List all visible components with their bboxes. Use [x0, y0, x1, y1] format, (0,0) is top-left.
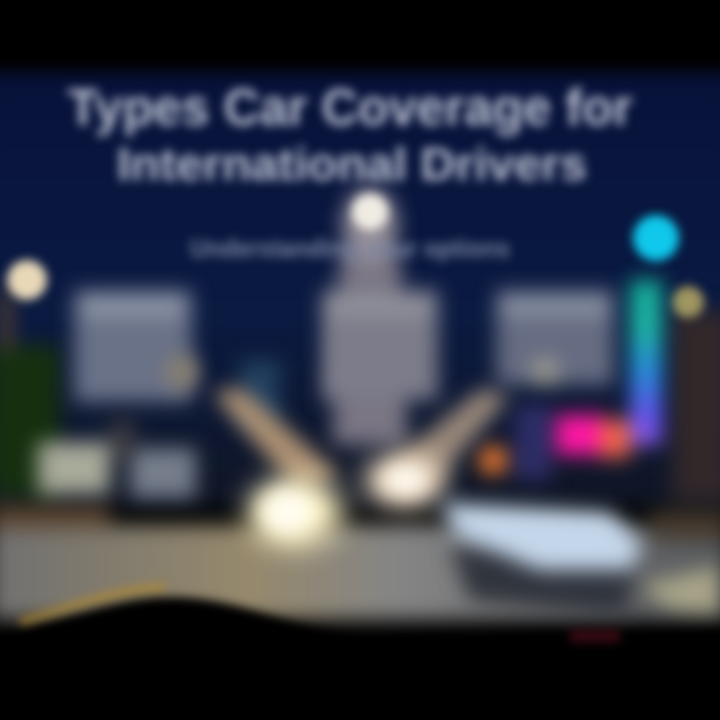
blue building glow: [515, 405, 551, 480]
left headlight glow: [247, 478, 343, 546]
right beam: [392, 388, 510, 482]
neon signs: [240, 280, 662, 480]
car shadow: [450, 545, 635, 615]
right road edge: [640, 565, 720, 615]
orange sign: [600, 420, 630, 458]
headlights: [247, 454, 445, 546]
car: [440, 502, 642, 615]
right panel glow: [530, 357, 560, 387]
center panel heading: [326, 296, 434, 316]
left street lamp glow: [7, 260, 47, 300]
center headlight glow: [365, 454, 445, 506]
panel: center: [322, 290, 438, 400]
small lamp: [165, 355, 199, 389]
headlight cores: [262, 466, 427, 534]
left panel heading: [80, 296, 185, 316]
right street lamp glow: [672, 286, 704, 318]
central tower: [332, 187, 408, 445]
night sky: [0, 68, 720, 508]
pink sign: [556, 415, 606, 455]
panel: left: [74, 290, 192, 402]
left trees: [0, 345, 60, 495]
right panel heading: [500, 296, 610, 316]
top black band: [0, 0, 720, 65]
tower top: [342, 187, 398, 263]
title: International Drivers: [117, 138, 587, 190]
title: [68, 79, 632, 190]
left sidewalk: [0, 505, 110, 529]
left storefronts: [38, 355, 199, 498]
left beam: [212, 388, 340, 495]
tower light: [352, 194, 388, 230]
panel: right: [496, 290, 614, 387]
street scene: [0, 290, 720, 620]
red reflection: [570, 630, 620, 642]
golden edge: [20, 587, 165, 622]
subtitle: Understanding your options: [190, 233, 510, 263]
headlight beams: [212, 388, 510, 495]
connector: [110, 420, 135, 460]
dim blue glow: [240, 360, 280, 425]
right dark building: [672, 310, 720, 500]
road surface: [0, 525, 720, 620]
left pole: [0, 290, 12, 350]
right sidewalk: [650, 510, 720, 540]
tower body: [332, 250, 408, 445]
vertical rainbow sign: [630, 280, 662, 445]
small orange light: [478, 445, 508, 475]
title: Types Car Coverage for: [68, 79, 632, 137]
black foreground hump: [0, 587, 720, 720]
car body: [440, 502, 642, 570]
cyan sign: [633, 215, 679, 261]
